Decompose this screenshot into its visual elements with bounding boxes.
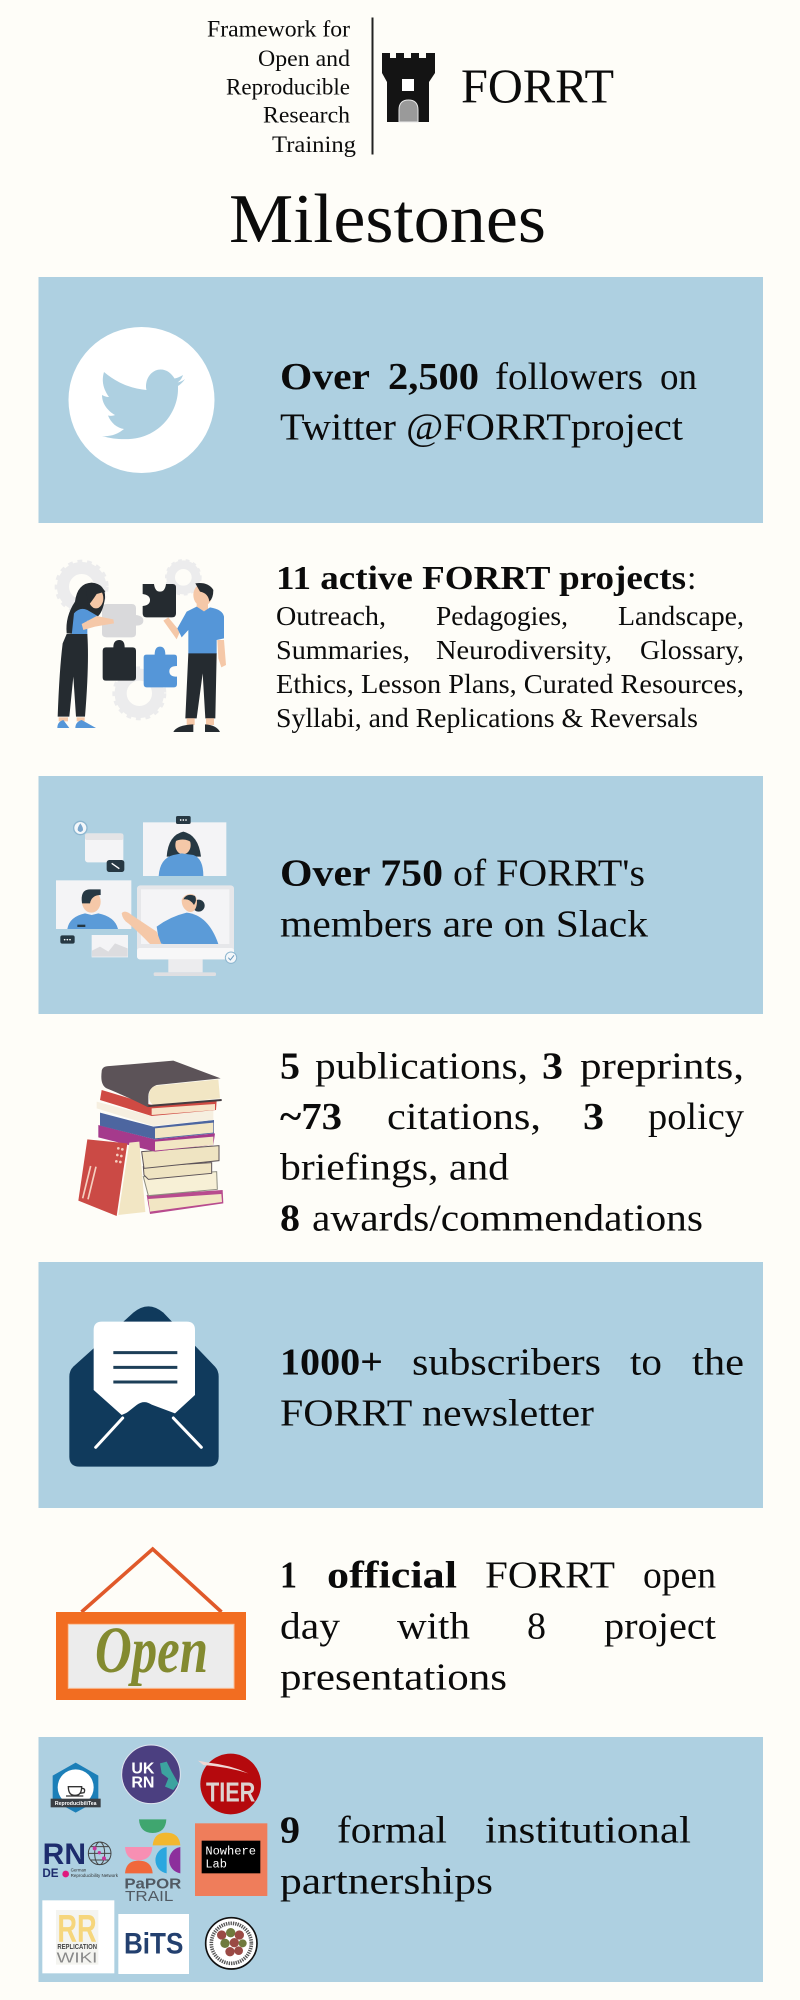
text: Twitter followers: 2,500 (388, 356, 479, 398)
header: FORRT logo block (207, 16, 614, 158)
text: active projects: Ethics, Lesson Plans, Curated Resources, (276, 669, 744, 699)
logo tagline: Framework for (207, 16, 350, 42)
text: open day: with (397, 1606, 470, 1648)
icon: open envelope (69, 1306, 219, 1467)
text: publications: 8 (280, 1198, 300, 1240)
icon: open sign: Open (95, 1614, 208, 1687)
text: newsletter: to (630, 1342, 662, 1384)
text: open day: 8 (527, 1606, 546, 1648)
text: active projects: Outreach, (276, 601, 386, 631)
illustration: people with puzzle pieces (57, 561, 226, 732)
text: partnerships: formal (337, 1810, 447, 1852)
logo tagline: Reproducible (226, 75, 350, 101)
text: publications: publications, (315, 1046, 528, 1088)
logo: PaPOR Trail: TRAIL (125, 1889, 173, 1905)
text: open day: 1 (280, 1554, 297, 1596)
text: active projects: Landscape, (618, 601, 744, 631)
text: active projects (276, 560, 744, 733)
icon: open sign (56, 1549, 246, 1700)
text: open day: day (280, 1606, 340, 1648)
logo tagline (207, 16, 356, 158)
logo: German Reproducibility Network: DE (42, 1867, 59, 1880)
panel: active projects (57, 560, 744, 733)
text: active projects: 11 active FORRT projects (276, 560, 686, 597)
text: Slack members: Over 750 (280, 852, 443, 894)
text: open day: open (643, 1554, 716, 1596)
logo: German Reproducibility Network: RN (43, 1838, 86, 1871)
panel: Twitter followers (38, 277, 763, 523)
text: Twitter followers: followers (495, 356, 643, 398)
panel: publications (78, 1046, 744, 1240)
man (163, 583, 226, 732)
text: open day: presentations (280, 1656, 507, 1698)
text: active projects: : (687, 560, 696, 597)
illustration: stack of books (78, 1061, 223, 1216)
text: open day: official (327, 1554, 457, 1596)
logo: German Reproducibility Network: German (71, 1867, 87, 1872)
text: Twitter followers: Over (280, 356, 370, 398)
text: active projects: Glossary, (640, 635, 744, 665)
text: newsletter: the (692, 1342, 744, 1384)
logo: PaPOR Trail (124, 1819, 182, 1905)
title: Milestones (229, 181, 546, 258)
logo tagline: Open and (258, 46, 350, 72)
logo: German Reproducibility Network: Reproducibility Network (71, 1873, 119, 1878)
text: partnerships: institutional (485, 1810, 691, 1852)
logo: PaPOR Trail: PaPOR (124, 1876, 182, 1892)
text: active projects: Summaries, (276, 635, 410, 665)
logo: UK RN: UK (131, 1760, 155, 1777)
panel: open day (56, 1549, 716, 1700)
text: active projects: Neurodiversity, (436, 635, 612, 665)
logo tagline: Training (272, 132, 356, 158)
text: active projects: Syllabi, and Replications & Reversals (276, 703, 698, 733)
text: newsletter: 1000+ (280, 1342, 383, 1384)
logo: ReproducibiliTea (51, 1763, 101, 1813)
logo: grape seal (206, 1918, 257, 1969)
logo: ReproducibiliTea: ReproducibiliTea (55, 1801, 97, 1807)
blue puzzle (144, 647, 177, 687)
icon: Twitter bird (68, 327, 214, 473)
text: Slack members: of FORRT's (453, 852, 645, 894)
text: newsletter: subscribers (412, 1342, 601, 1384)
text: Slack members: members are on Slack (280, 904, 648, 946)
text: partnerships: partnerships (280, 1860, 493, 1902)
text: publications (280, 1046, 744, 1240)
panel: partnerships (38, 1737, 763, 1982)
logo: German Reproducibility Network (42, 1838, 119, 1880)
logo: Nowhere Lab: Nowhere (205, 1845, 256, 1859)
logo tagline: Research (263, 103, 350, 129)
text: active projects: Pedagogies, (436, 601, 568, 631)
text: partnerships: 9 (280, 1810, 300, 1852)
logo: BITSS: BiTS (124, 1927, 183, 1960)
text: partnerships (280, 1810, 691, 1902)
text: newsletter (280, 1342, 744, 1434)
text: publications: preprints, (580, 1046, 744, 1088)
illustration: video call (56, 816, 237, 976)
woman (57, 583, 114, 728)
dark puzzle top (143, 584, 176, 617)
text: publications: ~73 (280, 1096, 342, 1138)
text: publications: citations, (387, 1096, 541, 1138)
dark puzzle bottom (103, 640, 136, 681)
icon: castle tower (382, 53, 435, 122)
grey puzzle (102, 604, 143, 637)
logo: Nowhere Lab: Lab (205, 1858, 227, 1872)
text: open day: project (604, 1606, 716, 1648)
text: publications: 3 (583, 1096, 604, 1138)
text: publications: 3 (542, 1046, 563, 1088)
logo: UK RN (122, 1745, 180, 1804)
text: Twitter followers (280, 356, 697, 448)
panel: Slack members (38, 776, 763, 1014)
logo: TIER (198, 1754, 261, 1814)
logo: BITSS (118, 1914, 189, 1974)
panel: newsletter (38, 1262, 763, 1508)
text: open day (280, 1554, 716, 1698)
text: newsletter: FORRT newsletter (280, 1392, 594, 1434)
text: publications: awards/commendations (312, 1198, 703, 1240)
logo: Replication Wiki: RR (57, 1908, 97, 1951)
text: publications: policy (648, 1096, 744, 1138)
text: Slack members (280, 852, 648, 946)
logo: Nowhere Lab (195, 1823, 267, 1896)
text: Twitter followers: on (660, 356, 697, 398)
partner logos (42, 1745, 267, 1974)
text: publications: 5 (280, 1046, 300, 1088)
text: open day: FORRT (485, 1554, 615, 1596)
logo: TIER: TIER (206, 1777, 255, 1808)
logo: Replication Wiki: REPLICATION (57, 1942, 97, 1951)
logo wordmark: FORRT (461, 59, 614, 114)
logo: UK RN: RN (131, 1774, 154, 1791)
text: Twitter followers: Twitter @FORRTproject (280, 406, 683, 448)
logo: Replication Wiki: WIKI (57, 1951, 97, 1967)
logo: Replication Wiki (42, 1900, 114, 1973)
text: publications: briefings, and (280, 1146, 509, 1188)
